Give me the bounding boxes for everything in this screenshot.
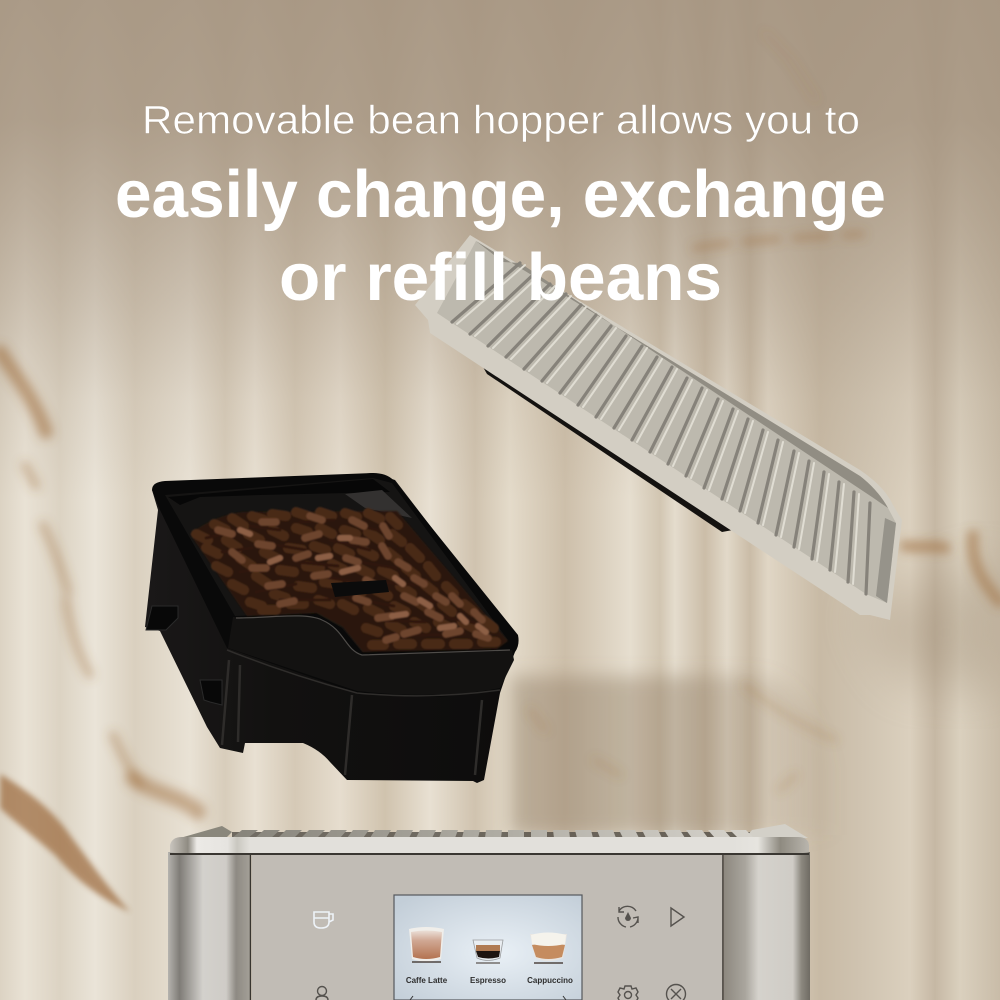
cup labels: Caffe Latte (406, 976, 448, 985)
machine top rim (170, 837, 809, 853)
machine right steel column (724, 852, 810, 1000)
lid underside shadow edge (483, 367, 733, 532)
lid outer frame (415, 235, 902, 620)
hopper interior (165, 478, 508, 652)
title text (115, 98, 886, 315)
machine left steel column (168, 852, 251, 1000)
screen arrows (410, 996, 566, 1000)
title line 1: Removable bean hopper allows you to (142, 98, 860, 142)
machine touchscreen (394, 895, 582, 1000)
hopper body highlights (222, 660, 482, 775)
lid inner tray (437, 241, 896, 603)
cup labels (406, 976, 573, 985)
cup: cappuccino (530, 932, 567, 963)
hopper rim (152, 473, 519, 697)
cup labels: Cappuccino (527, 976, 573, 985)
cup: caffe latte (409, 927, 444, 962)
hopper clips (146, 606, 222, 705)
coffee beans (190, 511, 508, 652)
lid top inner band (476, 241, 888, 508)
bean hopper (145, 473, 519, 783)
removable lid (415, 235, 902, 620)
icon: user (316, 986, 328, 1000)
title line 2: easily change, exchange (115, 157, 886, 232)
coffee machine (168, 824, 810, 1000)
icon: settings (618, 986, 638, 1000)
title line 3: or refill beans (279, 240, 722, 315)
icon: cancel (666, 984, 686, 1000)
hopper flap (331, 580, 389, 597)
lid ribs (452, 263, 870, 594)
cup: espresso (473, 940, 503, 963)
icon: play (671, 908, 684, 926)
machine front panel (252, 855, 723, 1000)
cup labels: Espresso (470, 976, 506, 985)
hopper body (145, 473, 518, 783)
icon: cup (314, 912, 333, 928)
hopper rim gloss (228, 616, 514, 695)
icon: rinse cycle (618, 906, 638, 927)
lower marble vein (0, 774, 130, 912)
machine top grille (180, 824, 808, 838)
